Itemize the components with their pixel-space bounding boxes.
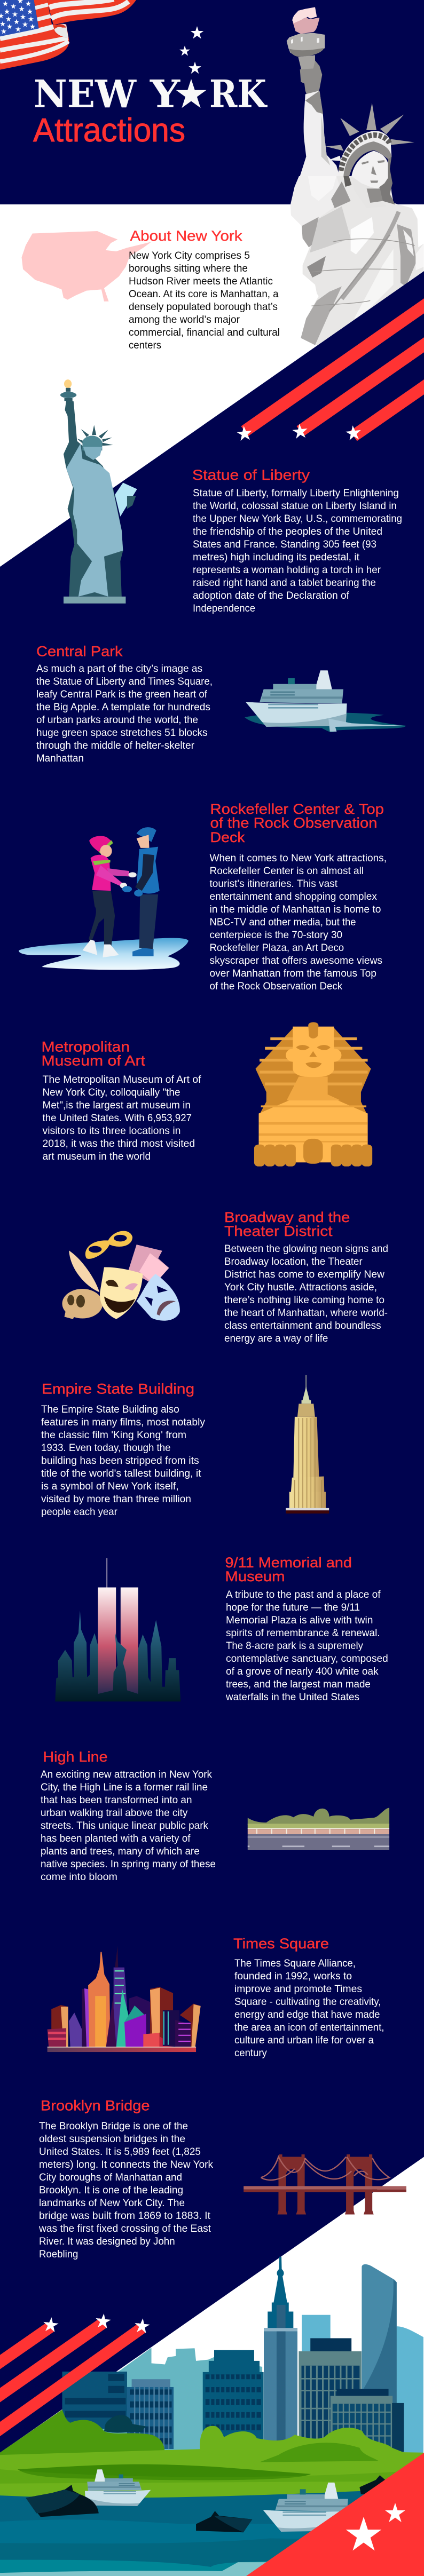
text block: York City hustle. Attractions aside, [224,1282,377,1293]
text block: people each year [41,1507,117,1518]
heading: Deck [210,829,245,845]
text block: As much a part of the city’s image as [36,663,202,675]
text block: streets. This unique linear public park [41,1820,208,1832]
heading: High Line [43,1749,108,1765]
heading: Central Park [36,644,123,660]
text block: oldest suspension bridges in the [39,2134,185,2145]
text block: plants and trees, many of which are [41,1846,200,1857]
text block: Ocean. At its core is Manhattan, a [129,289,279,300]
panel: 9/11 Memorial [225,1555,388,1703]
text block: that has been transformed into an [41,1795,192,1806]
heading: Brooklyn Bridge [41,2097,150,2113]
text block: tourist's itineraries. This vast [209,878,338,890]
text block: United States. It is 5,989 feet (1,825 [39,2146,201,2158]
illustration: theater masks [62,1231,180,1321]
text block: among the world’s major [129,314,240,326]
panel: Brooklyn Bridge [38,2097,213,2260]
text block: Roebling [39,2249,78,2260]
decorative red stripes top [236,292,424,441]
text block: Manhattan [36,753,84,764]
text block: An exciting new attraction in New York [41,1769,212,1780]
heading: Theater District [224,1223,333,1239]
text block [41,1404,205,1518]
text block: art museum in the world [43,1151,151,1162]
text block: spirits of remembrance & renewal. [226,1628,380,1639]
text block: through the middle of helter-skelter [36,740,195,751]
heading [210,801,384,845]
panel: High Line [41,1749,216,1883]
text block: Rockefeller Plaza, an Art Deco [209,942,344,954]
text block: urban walking trail above the city [41,1808,188,1819]
text block: adoption date of the Declaration of [193,590,350,601]
panel: Broadway [224,1209,388,1344]
text block: century [234,2048,267,2059]
heading [225,1555,352,1584]
subtitle: Attractions [33,112,185,149]
text block: centerpiece is the 70-story 30 [209,930,342,941]
text block: the Upper New York Bay, U.S., commemorating [193,513,402,525]
text block: building has been stripped from its [41,1455,199,1467]
text block: in the middle of Manhattan is home to [209,904,381,915]
illustration: High Line park [248,1808,389,1850]
text block: the Big Apple. A template for hundreds [36,702,210,713]
text block: Memorial Plaza is alive with twin [226,1615,373,1626]
heading: Statue of Liberty [192,467,310,483]
text block: title of the world's tallest building, it [41,1468,201,1479]
text block: hope for the future — the 9/11 [226,1602,360,1613]
panel: Rockefeller Center [209,801,387,992]
heading: Museum of Art [42,1052,145,1068]
text block: the classic film 'King Kong' from [41,1430,186,1441]
panel: about New York [129,228,280,351]
text block: Hudson River meets the Atlantic [129,276,273,287]
text block: represents a woman holding a torch in her [193,565,381,576]
text block: huge green space stretches 51 blocks [36,727,207,739]
text block: waterfalls in the United States [225,1692,359,1703]
text block: centers [129,340,161,351]
text block: there’s nothing like coming home to [224,1295,384,1306]
text block: the World, colossal statue on Liberty Island in [193,501,397,512]
text block: NBC-TV and other media, but the [209,917,356,928]
heading [42,1039,145,1068]
panel: Empire State Building [41,1381,205,1518]
text block: bridge was built from 1869 to 1883. It [39,2210,211,2222]
icon: American flag [0,0,136,70]
text block: the heart of Manhattan, where world- [224,1307,388,1319]
text block: 2018, it was the third most visited [43,1138,195,1150]
text block: New York City comprises 5 [129,250,250,261]
text block: Square - cultivating the creativity, [234,1996,381,2008]
text block: visited by more than three million [41,1494,191,1505]
text block: When it comes to New York attractions, [209,853,387,864]
text block: landmarks of New York City. The [39,2198,185,2209]
text block: raised right hand and a tablet bearing the [193,577,376,589]
text block: New York City, colloquially "the [43,1087,180,1098]
text block: boroughs sitting where the [129,263,248,274]
panel: Times Square [233,1936,384,2059]
heading: Times Square [233,1936,329,1952]
text block: come into bloom [41,1872,117,1883]
text block: culture and urban life for over a [234,2035,374,2046]
text block: The 8-acre park is a supremely [226,1640,363,1652]
illustration: cruise ship [245,670,406,732]
title stars [179,26,203,74]
text block: States and France. Standing 305 feet (93 [193,539,376,550]
text block: class entertainment and boundless [224,1320,381,1331]
text block: District has come to exemplify New [224,1269,384,1280]
text block: The Metropolitan Museum of Art of [43,1074,201,1085]
text block: of urban parks around the world, the [36,715,198,726]
text block: trees, and the largest man made [226,1679,371,1690]
heading: Empire State Building [42,1381,194,1397]
text block: energy are a way of life [224,1333,328,1344]
text block: metres) high including its pedestal, it [193,552,360,563]
text block: commercial, financial and cultural [129,327,280,338]
text block: the United States. With 6,953,927 [43,1113,192,1124]
text block: Broadway location, the Theater [224,1256,363,1267]
text block [43,1074,201,1162]
header navy panel [0,0,424,204]
heading: 9/11 Memorial and [225,1555,352,1571]
heading: About New York [130,228,242,244]
red corner with stars [246,2453,424,2576]
heading: Museum [225,1568,285,1584]
illustration: Brooklyn Bridge [244,2154,406,2215]
text block: the area an icon of entertainment, [234,2022,384,2033]
text block [234,1958,384,2059]
text block: over Manhattan from the famous Top [209,968,376,979]
bottom city illustration [0,2257,423,2576]
text block: skyscraper that offers awesome views [209,955,382,966]
text block: Between the glowing neon signs and [224,1243,388,1255]
illustration: Empire State Building [286,1375,329,1513]
text block [36,663,213,764]
text block: meters) long. It connects the New York [39,2159,213,2170]
text block: is a symbol of New York itself, [41,1481,179,1492]
heading [224,1209,350,1239]
title: RK [209,72,268,116]
text block [129,250,280,351]
text block: City boroughs of Manhattan and [39,2172,182,2183]
title: NEW [34,72,137,116]
flag stars [0,0,35,34]
text block [224,1243,388,1344]
text block [193,488,402,614]
text block: energy and edge that have made [234,2009,380,2020]
panel: Statue of Liberty [192,467,402,614]
text block: founded in 1992, works to [234,1971,352,1982]
text block: of a grove of nearly 400 white oak [226,1666,379,1677]
text block: Rockefeller Center is on almost all [209,866,364,877]
decorative red stripes bottom [0,2313,151,2440]
illustration: neon city [48,1946,201,2052]
illustration: twin towers skyline [55,1558,180,1701]
text block: improve and promote Times [234,1984,362,1995]
panel: Central Park [36,644,213,764]
text block: entertainment and shopping complex [209,891,377,902]
text block [209,853,387,992]
illustration: ice skaters [19,827,189,970]
text block: features in many films, most notably [41,1417,205,1428]
text block: Independence [193,603,255,614]
text block: has been planted with a variety of [41,1833,191,1844]
text block: Statue of Liberty, formally Liberty Enlightening [193,488,399,499]
text block: The Brooklyn Bridge is one of the [39,2121,188,2132]
heading: of the Rock Observation [210,815,377,831]
illustration: large Statue of Liberty [287,7,423,348]
text block: The Empire State Building also [41,1404,179,1415]
title [34,72,268,116]
text block: was the first fixed crossing of the East [38,2223,211,2234]
text block: visitors to its three locations in [43,1125,180,1137]
text block [225,1589,388,1703]
text block: Met",is the largest art museum in [43,1100,191,1111]
text block: A tribute to the past and a place of [226,1589,381,1600]
text block: River. It was designed by John [39,2236,175,2247]
text block: leafy Central Park is the green heart of [36,689,208,700]
heading: Metropolitan [42,1039,130,1055]
text block [38,2121,213,2260]
text block: 1933. Even today, though the [41,1442,171,1454]
text block [41,1769,216,1883]
panel: Metropolitan Museum of Art [42,1039,201,1162]
text block: City, the High Line is a former rail line [41,1782,208,1793]
icon: US map [22,231,152,302]
heading: Broadway and the [224,1209,350,1225]
illustration: small Statue of Liberty [60,379,137,604]
heading: Rockefeller Center & Top [210,801,384,817]
text block: The Times Square Alliance, [234,1958,356,1969]
text block: Brooklyn. It is one of the leading [39,2185,183,2196]
illustration: sphinx [254,1022,372,1167]
text block: the friendship of the peoples of the United [193,526,382,537]
text block: native species. In spring many of these [41,1859,216,1870]
text block: densely populated borough that’s [129,302,278,313]
text block: the Statue of Liberty and Times Square, [36,676,213,687]
text block: contemplative sanctuary, composed [226,1653,388,1665]
text block: of the Rock Observation Deck [209,981,343,992]
title: Y [150,72,180,116]
